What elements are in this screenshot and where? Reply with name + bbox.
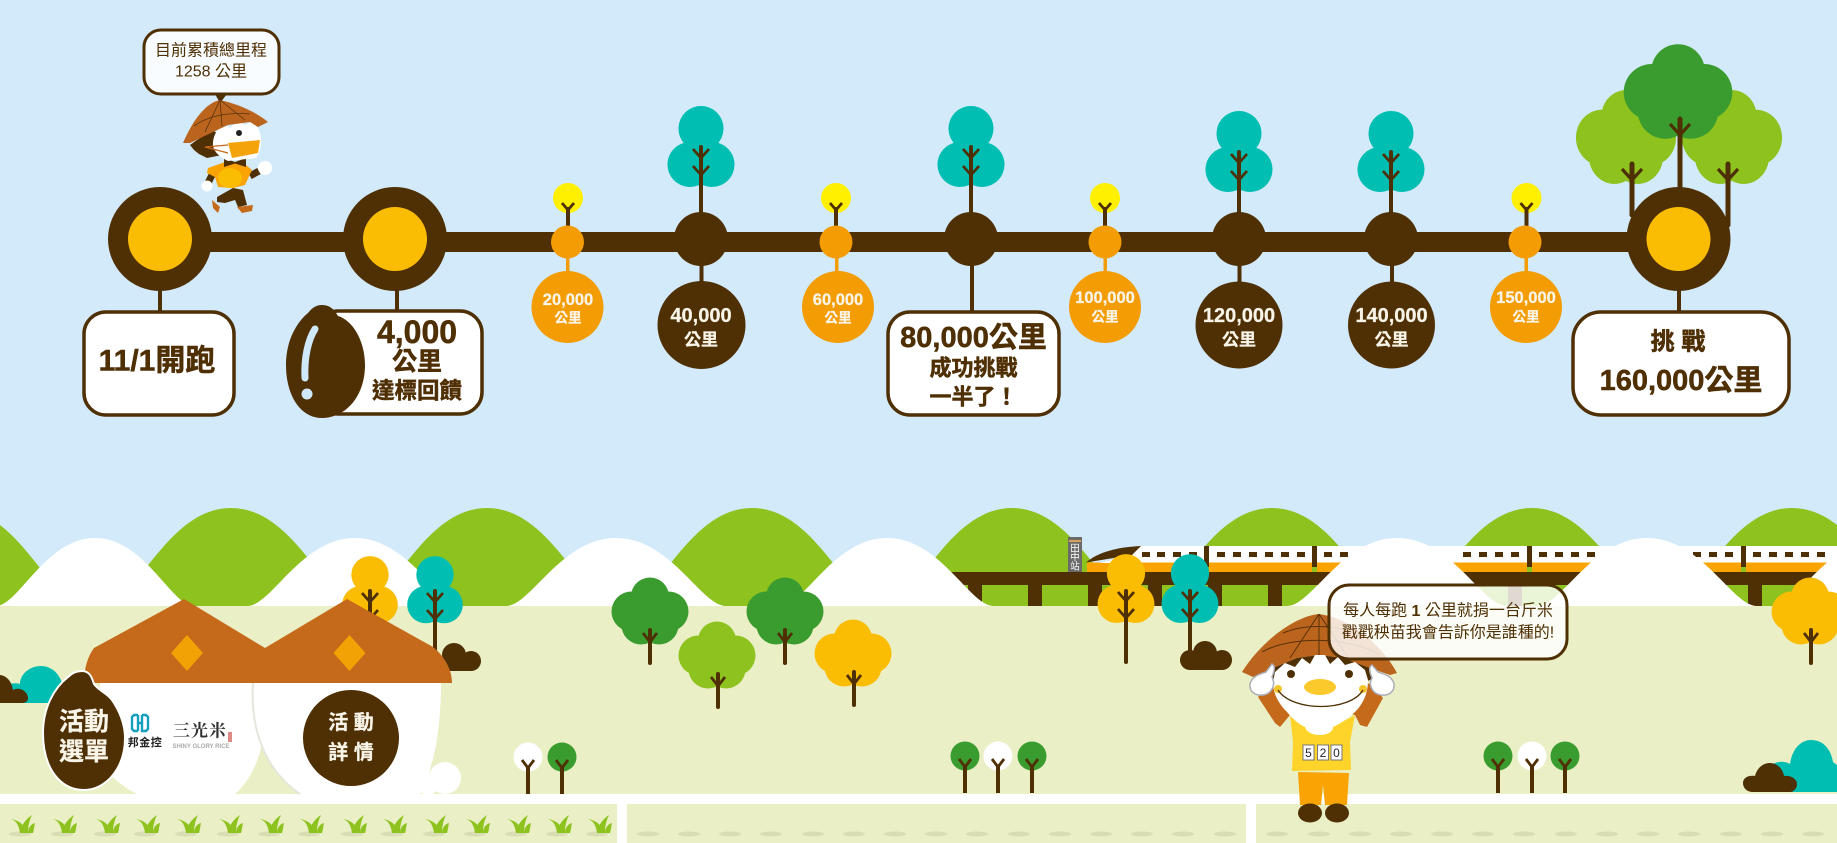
- milestone: 20,000: 公里: [554, 310, 582, 326]
- jacket: [207, 162, 252, 188]
- eyes: [1287, 670, 1295, 678]
- button: activity details: 活 動: [328, 711, 374, 734]
- bib number: 2: [1320, 746, 1327, 760]
- gloves: [1250, 664, 1394, 695]
- milestone: 80,000 with tree: 成功挑戰: [929, 356, 1018, 380]
- milestone: 4,000: [286, 187, 482, 418]
- milestone: 80,000 with tree: 一半了！: [929, 384, 1018, 410]
- speech bubble: mascot: 每人每跑 1 公里就捐一台斤米: [1343, 602, 1553, 620]
- field furrows: [637, 832, 1824, 836]
- white path and lower strips: [0, 794, 1837, 843]
- hat: [183, 100, 268, 143]
- button: activity menu grain: 選單: [59, 738, 109, 766]
- green hills: [0, 508, 1837, 606]
- station sign: [1068, 537, 1082, 572]
- landscape trees: round-crown group: [612, 578, 1837, 707]
- milestone: 140,000 with tree: 140,000: [1355, 305, 1428, 327]
- milestone: goal 160,000: 160,000公里: [1600, 364, 1762, 397]
- milestone: 150,000: [1490, 183, 1562, 343]
- station sign: 田: [1070, 544, 1080, 554]
- milestone: 80,000 with tree: 80,000公里: [900, 321, 1047, 354]
- milestone: 80,000 with tree: [888, 106, 1059, 415]
- milestone: 60,000: 公里: [824, 310, 852, 326]
- logo: bank holding: [128, 715, 162, 749]
- milestone: goal 160,000: [1573, 44, 1789, 415]
- eye: [236, 130, 242, 136]
- milestone: 4,000: 達標回饋: [372, 378, 462, 404]
- milestone: 120,000 with tree: [1196, 111, 1282, 368]
- mascot: thumbs-up farmer: [1242, 614, 1397, 822]
- smile: [1278, 690, 1363, 706]
- hair: [1265, 655, 1380, 682]
- bush: station: [1180, 641, 1232, 670]
- milestone: 140,000 with tree: 公里: [1374, 330, 1408, 350]
- milestone: 150,000: 公里: [1512, 310, 1540, 324]
- logo: rice brand: SHINY GLORY RICE: [173, 744, 229, 750]
- timeline bar: [160, 232, 1678, 252]
- grass tufts: [9, 815, 612, 836]
- milestone: start: [84, 187, 234, 415]
- milestone: 60,000: 60,000: [813, 291, 863, 309]
- current distance bubble: 1258 公里: [175, 62, 247, 80]
- elevated railway bridge: [948, 572, 1837, 606]
- bib number: 0: [1333, 746, 1340, 760]
- milestone: 4,000: 公里: [392, 348, 442, 376]
- logo: rice brand: 三光米: [173, 720, 227, 740]
- speech bubble: mascot: 戳戳秧苗我會告訴你是誰種的!: [1342, 624, 1554, 642]
- milestone: 100,000: [1069, 183, 1141, 343]
- milestone: 20,000: 20,000: [543, 291, 593, 309]
- milestone: 20,000: [532, 183, 604, 343]
- shoes: [212, 200, 253, 213]
- landscape trees: house pair: [342, 556, 463, 652]
- beak: [1304, 679, 1336, 695]
- train: [1086, 546, 1837, 572]
- milestone: 40,000 with tree: [658, 106, 746, 369]
- roofs: [84, 599, 452, 683]
- cheeks: [1274, 685, 1282, 693]
- button: activity details: 詳 情: [328, 740, 374, 764]
- shirt: [1290, 715, 1355, 771]
- runner mascot with mask: [183, 100, 272, 213]
- roof diamonds: [171, 635, 366, 671]
- hair: [190, 130, 224, 158]
- small round trees: [514, 742, 1580, 794]
- trousers: [1298, 772, 1349, 805]
- white hills: [0, 538, 1837, 606]
- face: [1273, 655, 1368, 735]
- mask: [228, 140, 260, 158]
- bib number: 5: [1305, 746, 1312, 760]
- button: activity menu grain: [43, 671, 125, 790]
- milestone: start: 11/1開跑: [99, 344, 215, 378]
- station sign: 中: [1070, 552, 1080, 564]
- milestone: 40,000 with tree: 公里: [684, 330, 718, 350]
- milestone: 150,000: 150,000: [1496, 289, 1556, 307]
- milestone: 100,000: 公里: [1092, 310, 1118, 324]
- button: activity details: [303, 690, 399, 786]
- arms: [1258, 680, 1383, 727]
- milestone: 100,000: 100,000: [1075, 289, 1135, 307]
- milestone: goal 160,000: 挑 戰: [1651, 328, 1705, 356]
- shoes: [1298, 804, 1322, 822]
- rice-grain houses: [84, 599, 461, 795]
- bush: far left: [0, 666, 63, 703]
- milestone: 120,000 with tree: 公里: [1222, 330, 1256, 350]
- current distance bubble: 目前累積總里程: [155, 42, 267, 60]
- station sign: 站: [1070, 560, 1080, 572]
- milestone: 120,000 with tree: 120,000: [1203, 305, 1275, 327]
- landscape trees: station pair: [1098, 554, 1218, 662]
- milestone: 140,000 with tree: [1348, 111, 1435, 368]
- milestone: 40,000 with tree: 40,000: [670, 305, 732, 327]
- bow tie: [224, 158, 246, 167]
- arms: [208, 171, 259, 183]
- ground: [0, 606, 1837, 794]
- bib number: [1303, 745, 1342, 760]
- goal forest: [1576, 44, 1782, 225]
- rice grain: [286, 305, 365, 418]
- bush: far right: [1743, 740, 1837, 792]
- current distance bubble: [144, 30, 279, 103]
- shirt: [218, 168, 242, 188]
- milestone: 60,000: [802, 183, 874, 343]
- milestone: 4,000: 4,000: [377, 314, 457, 350]
- button: activity menu grain: 活動: [59, 708, 109, 736]
- logo: bank holding: 邦金控: [128, 735, 162, 749]
- bush: house: [442, 643, 481, 671]
- trousers: [217, 188, 247, 207]
- hat: [1242, 614, 1397, 677]
- logo: rice brand: [173, 720, 232, 750]
- face: [213, 120, 261, 161]
- speech bubble: mascot: [1329, 585, 1567, 659]
